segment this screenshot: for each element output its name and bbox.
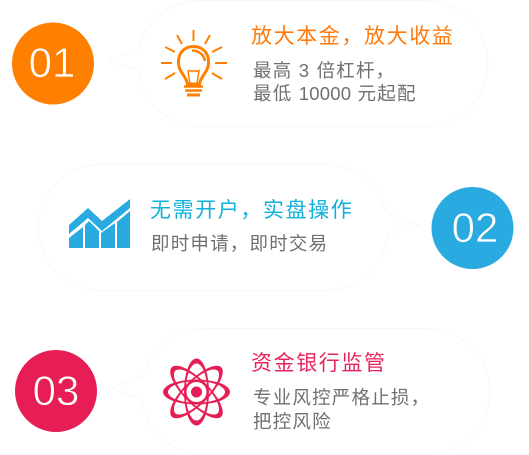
body text 03: 专业风控严格止损， <box>253 387 430 408</box>
icon: atom <box>163 358 230 426</box>
body text 03 <box>253 387 430 432</box>
speech bubble 02 <box>38 164 419 291</box>
icon: rising chart <box>69 199 130 248</box>
panel: item 02 <box>38 164 514 291</box>
body text 01 <box>253 60 417 104</box>
number badge 01: 01 <box>29 39 75 86</box>
number badge 02 <box>432 187 514 269</box>
number badge 03 <box>15 350 97 432</box>
speech bubble 01 <box>107 0 488 127</box>
body text 01: 最高 3 倍杠杆， <box>253 60 395 81</box>
speech bubble 03 <box>110 328 490 455</box>
icon: light bulb <box>161 30 227 95</box>
body text 01: 最低 10000 元起配 <box>253 83 417 104</box>
body text 03: 把控风险 <box>253 411 332 432</box>
number badge 02: 02 <box>452 204 498 251</box>
panel: item 01 <box>12 0 488 127</box>
number badge 03: 03 <box>33 367 79 414</box>
heading 01: 放大本金，放大收益 <box>251 25 454 48</box>
body text 02: 即时申请，即时交易 <box>151 233 328 254</box>
heading 02: 无需开户，实盘操作 <box>150 199 353 222</box>
number badge 01 <box>12 22 94 104</box>
heading 03: 资金银行监管 <box>251 352 387 375</box>
panel: item 03 <box>15 328 490 455</box>
